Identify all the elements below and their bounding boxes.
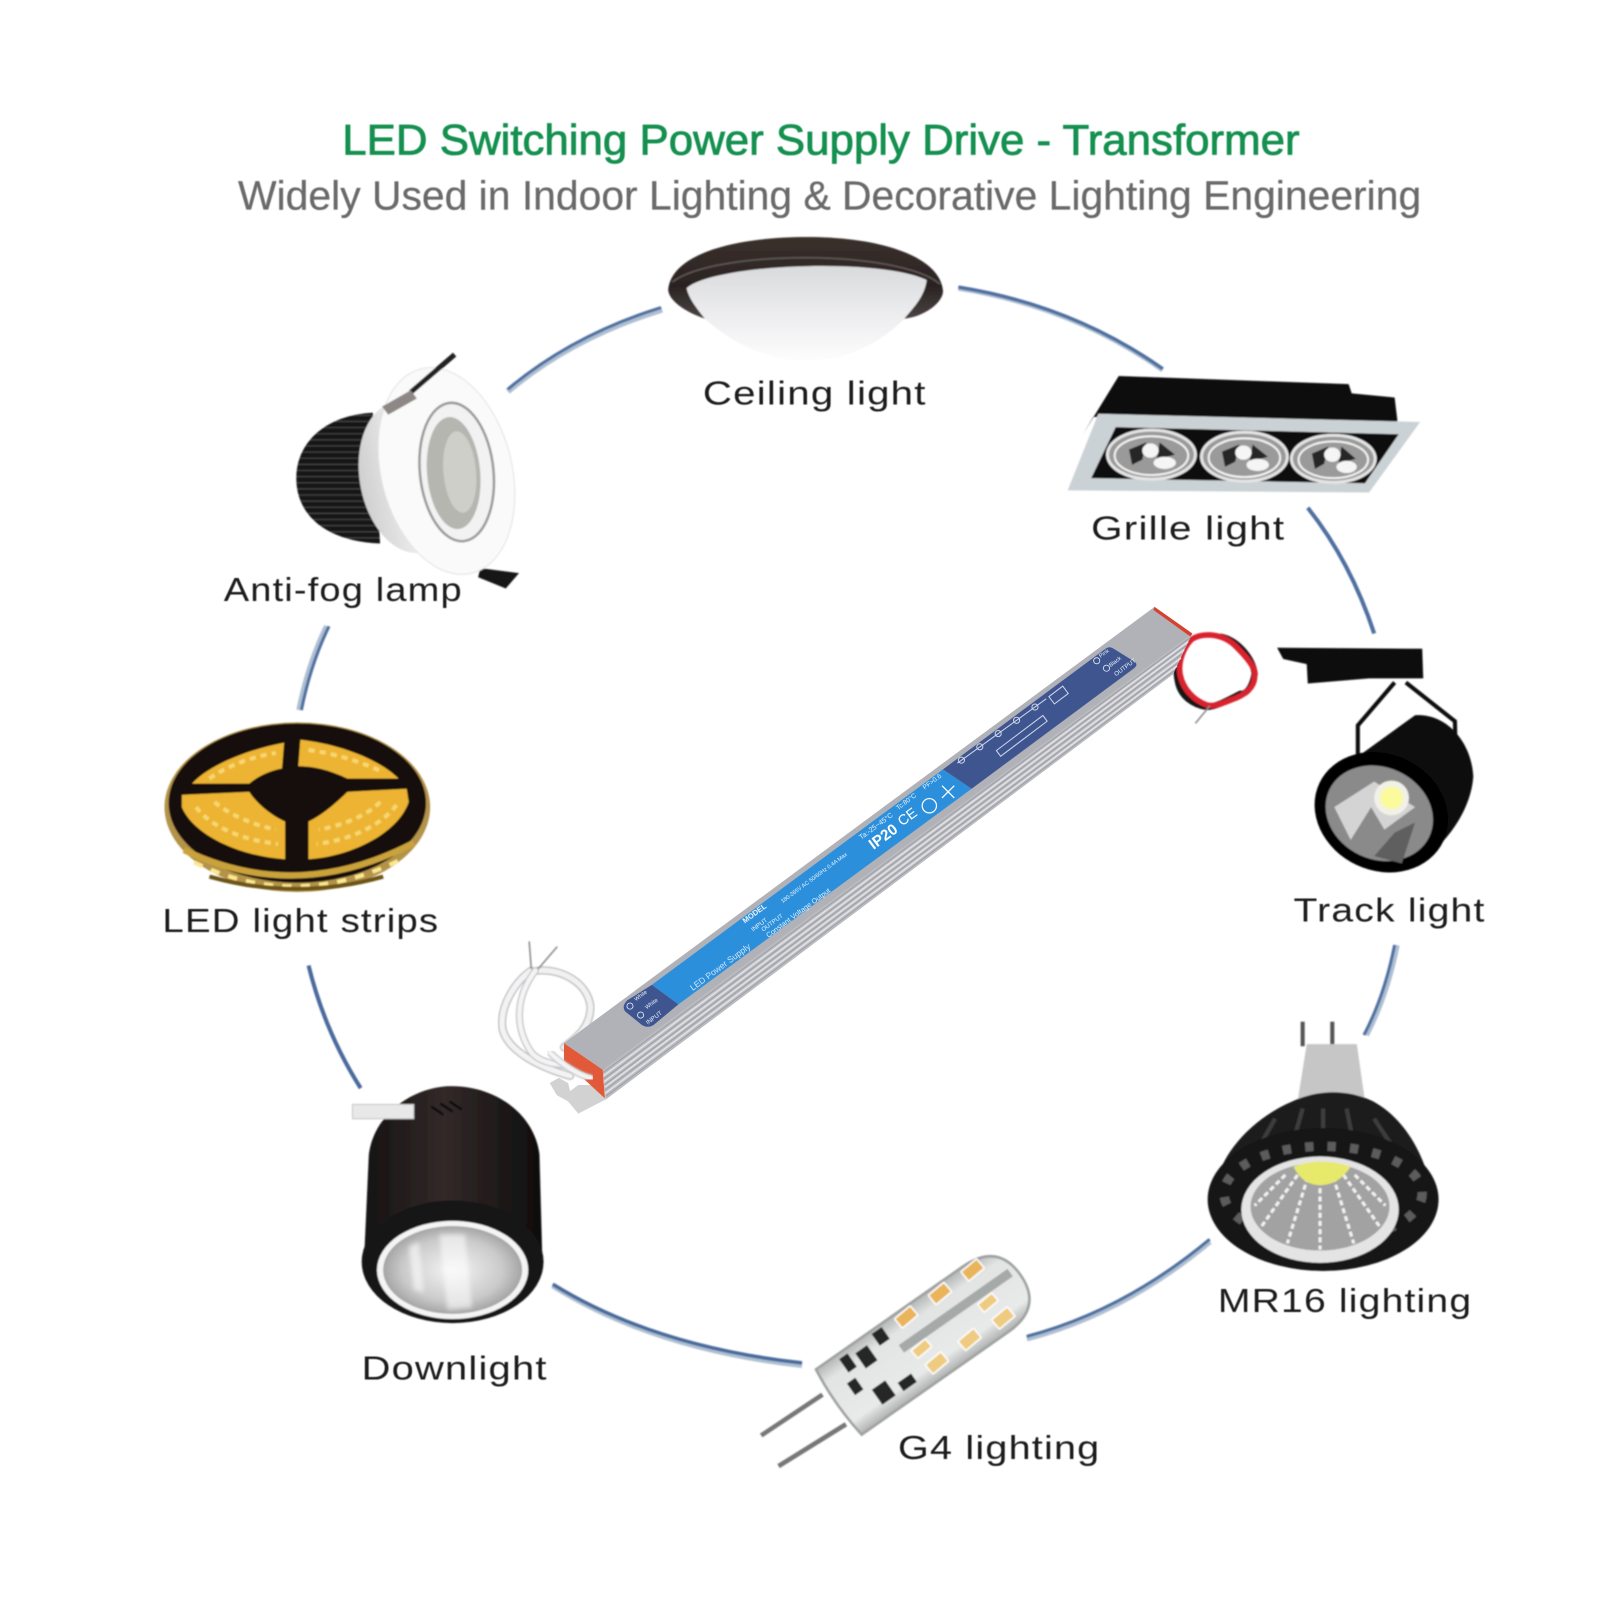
- device label text: LED Power Supply: [688, 941, 753, 993]
- icon: MR16 lamp: [1208, 1022, 1439, 1271]
- label: grille light: Grille light: [1091, 509, 1285, 547]
- navy input panel: [624, 985, 678, 1027]
- mounting bracket: [550, 1078, 606, 1114]
- device label text: White: [634, 990, 649, 1003]
- power supply unit: [502, 607, 1255, 1114]
- device label text: CE: [895, 805, 921, 830]
- device label text: Black: [1108, 656, 1123, 669]
- icon: track light: [1277, 648, 1473, 894]
- label: G4 lighting: G4 lighting: [898, 1429, 1100, 1467]
- label: LED light strips: LED light strips: [162, 902, 439, 940]
- device label text: INPUT: [645, 1010, 664, 1026]
- device label text: OUTPUT: [760, 913, 785, 933]
- device label text: Ta:-25~45°C: [858, 811, 895, 841]
- icon: downlight: [352, 1086, 544, 1323]
- navy output panel: [943, 647, 1136, 789]
- label: downlight: Downlight: [362, 1349, 548, 1387]
- label: ceiling light: Ceiling light: [703, 375, 927, 413]
- white input wires front: [550, 1052, 591, 1078]
- title: LED Switching Power Supply Drive - Transformer: [342, 116, 1300, 164]
- device label text: INPUT: [750, 917, 769, 933]
- connecting ring arcs: [299, 287, 1397, 1365]
- orange end caps: [564, 1043, 605, 1098]
- housing fins: [603, 633, 1192, 1099]
- label: anti-fog lamp: Anti-fog lamp: [224, 571, 463, 609]
- device label text: Constant Voltage Output: [765, 887, 832, 940]
- device label text: Tc:80°C: [895, 791, 918, 812]
- subtitle: Widely Used in Indoor Lighting & Decorative Lighting Engineering: [238, 172, 1421, 218]
- icon: G4 lamp: [761, 1242, 1043, 1466]
- device label text: MODEL: [741, 901, 768, 925]
- white input wires behind: [502, 942, 591, 1076]
- device label text: 180-265V AC 50/60Hz 0.4A Max: [780, 852, 849, 905]
- icon: ceiling light: [668, 237, 943, 361]
- device label text: PF>0.6: [922, 773, 943, 791]
- device label text: Pink: [1098, 648, 1111, 660]
- device label text: IP20: [866, 821, 901, 853]
- wiring diagram on output panel: [957, 686, 1068, 763]
- icon: anti-fog lamp: [296, 353, 535, 589]
- icon: grille light: [1068, 376, 1420, 492]
- device label text: OUTPUT: [1113, 657, 1138, 678]
- device label text: [627, 648, 1138, 1026]
- label: MR16 lighting: MR16 lighting: [1218, 1282, 1472, 1320]
- black and red output wires: [1177, 635, 1255, 723]
- blue label panel: [652, 769, 972, 1004]
- icon: LED strip reel: [164, 722, 430, 892]
- label: track light: Track light: [1293, 892, 1486, 930]
- housing: [564, 607, 1192, 1099]
- device label text: White: [644, 998, 659, 1011]
